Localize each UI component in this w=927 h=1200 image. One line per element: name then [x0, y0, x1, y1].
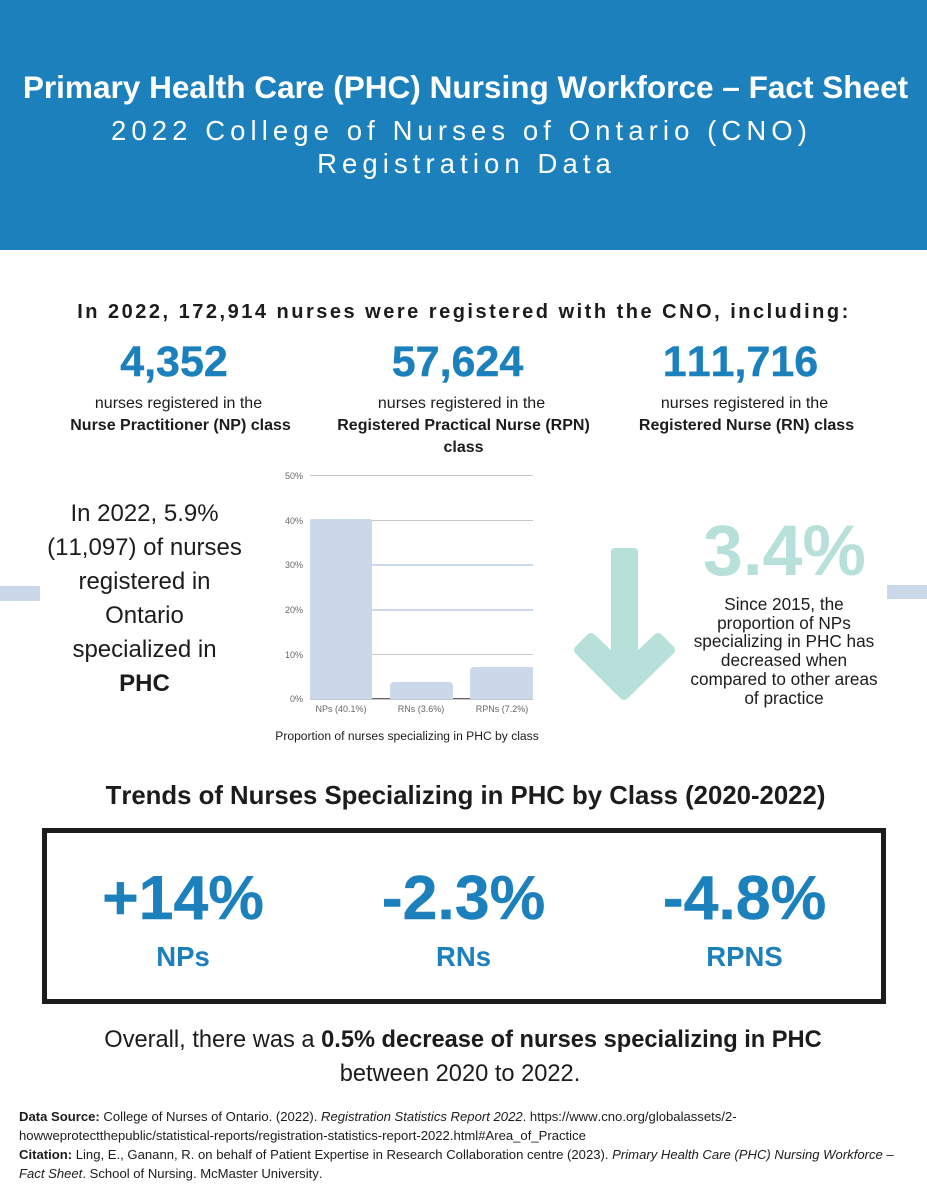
subtitle [111, 115, 812, 179]
decorative side tab right [887, 585, 927, 599]
description: Registered Practical Nurse (RPN) [337, 417, 590, 434]
bar: RPNs [470, 667, 533, 699]
subtitle: Registration Data [317, 148, 616, 179]
description: Registered Nurse (RN) class [639, 417, 854, 434]
category labels: NPs (40.1%) [315, 704, 367, 714]
citation: Citation: Ling, E., Ganann, R. on behalf of Patient Expertise in Research Collaboration centre (2023). Primary Health Care (PHC) Nursing Workforce – [19, 1147, 894, 1162]
overall summary text: between 2020 to 2022. [340, 1061, 580, 1087]
description [70, 395, 291, 434]
header banner [0, 0, 927, 250]
stat: 3.4 percent: 3.4% [703, 511, 866, 591]
description: nurses registered in the [95, 395, 262, 412]
data source: howweprotectthepublic/statistical-reports/registration-statistics-report-2022.html#Area_of_Practice [19, 1128, 586, 1143]
description [639, 395, 854, 434]
references [19, 1109, 894, 1181]
stat: NP count [70, 338, 291, 434]
axis labels: 20% [285, 605, 303, 615]
trends heading: Trends of Nurses Specializing in PHC by Class (2020-2022) [106, 782, 825, 810]
description: Nurse Practitioner (NP) class [70, 417, 291, 434]
trend: NPs: NPs [156, 941, 210, 972]
text: NP proportion decrease: specializing in PHC has [694, 631, 874, 651]
axis labels: 0% [290, 694, 303, 704]
text: NP proportion decrease: decreased when [721, 650, 847, 670]
citation: Fact Sheet. School of Nursing. McMaster University. [19, 1166, 322, 1181]
axis labels: 10% [285, 650, 303, 660]
stat: RN count [639, 338, 854, 434]
text: NP proportion decrease [690, 594, 878, 708]
number: 111,716 [663, 338, 818, 386]
chart caption: Proportion of nurses specializing in PHC by class [275, 729, 539, 743]
trend: RPNs [663, 863, 826, 972]
intro heading: In 2022, 172,914 nurses were registered with the CNO, including: [77, 301, 851, 323]
trend: RPNs: RPNS [706, 941, 783, 972]
decorative side tab left [0, 586, 40, 601]
bar: NPs [310, 519, 372, 699]
trend: NPs: +14% [102, 863, 264, 933]
trend: RPNs: -4.8% [663, 863, 826, 933]
trend: RNs: RNs [436, 941, 491, 972]
description: nurses registered in the [661, 395, 828, 412]
overall summary text: Overall, there was a 0.5% decrease of nurses specializing in PHC [104, 1027, 822, 1053]
description: nurses registered in the [378, 395, 545, 412]
data source [19, 1109, 737, 1143]
bar chart [275, 471, 539, 743]
axis labels [285, 471, 303, 704]
number: 57,624 [392, 338, 523, 386]
text: share specializing in PHC: specialized in [72, 636, 217, 663]
panel: trends [42, 828, 886, 1004]
description: class [443, 439, 484, 456]
trend: NPs [102, 863, 264, 972]
title: Primary Health Care (PHC) Nursing Workforce – Fact Sheet [23, 69, 908, 105]
trend: RNs [382, 863, 545, 972]
text: NP proportion decrease: Since 2015, the [724, 594, 844, 614]
trend: RNs: -2.3% [382, 863, 545, 933]
text: share specializing in PHC [47, 500, 242, 697]
subtitle: 2022 College of Nurses of Ontario (CNO) [111, 115, 812, 146]
category labels [315, 704, 528, 714]
icon: down arrow [574, 548, 675, 700]
citation [19, 1147, 894, 1181]
bar: RNs [390, 682, 453, 699]
text: share specializing in PHC: PHC [119, 670, 170, 697]
category labels: RNs (3.6%) [398, 704, 444, 714]
number: 4,352 [120, 338, 228, 386]
axis labels: 40% [285, 516, 303, 526]
text: share specializing in PHC: (11,097) of nurses [47, 534, 242, 561]
axis labels: 30% [285, 560, 303, 570]
text: NP proportion decrease: proportion of NPs [717, 613, 851, 633]
category labels: RPNs (7.2%) [476, 704, 528, 714]
description [337, 395, 590, 456]
data source: Data Source: College of Nurses of Ontario. (2022). Registration Statistics Report 2022. https://www.cno.org/globalassets/2- [19, 1109, 737, 1124]
text: NP proportion decrease: of practice [744, 688, 824, 708]
stat: RPN count [337, 338, 590, 456]
text: NP proportion decrease: compared to other areas [690, 669, 878, 689]
axis labels: 50% [285, 471, 303, 481]
text: share specializing in PHC: Ontario [105, 602, 184, 629]
text: share specializing in PHC: In 2022, 5.9% [70, 500, 219, 527]
text: share specializing in PHC: registered in [78, 568, 211, 595]
overall summary text [104, 1027, 822, 1087]
